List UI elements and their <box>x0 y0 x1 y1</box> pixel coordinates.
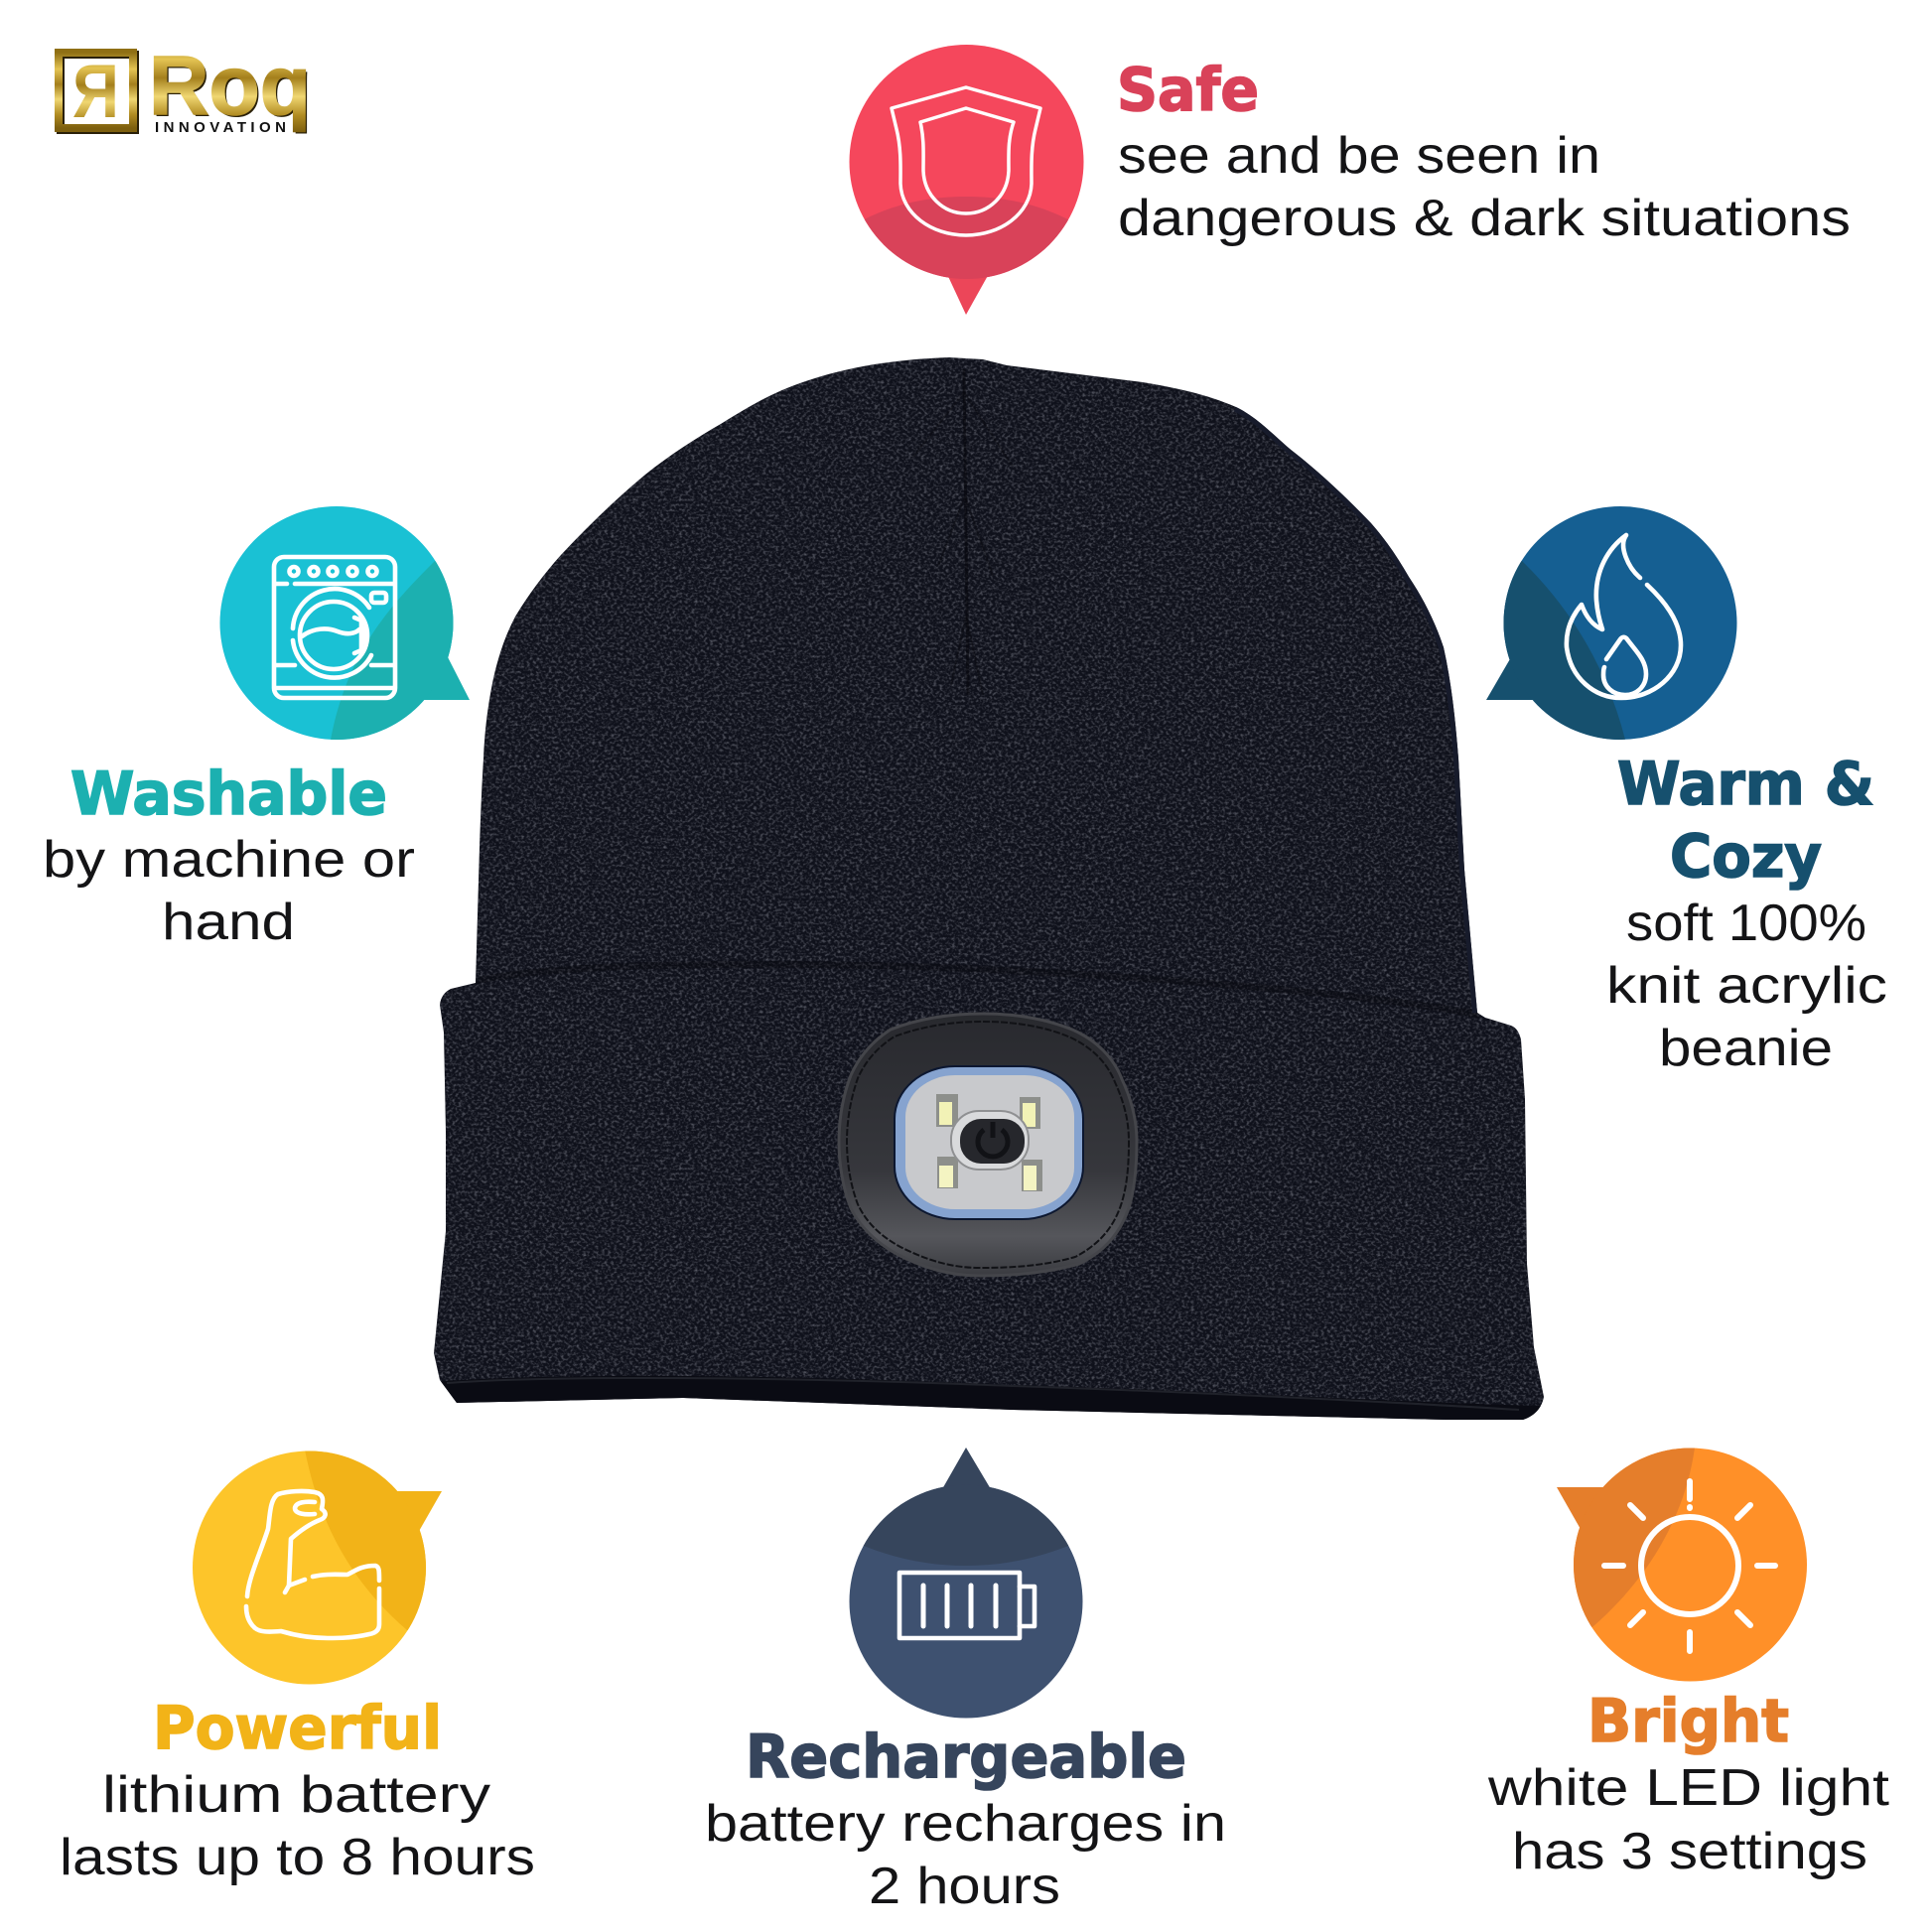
callout: Rechargeable <box>705 1448 1226 1915</box>
beanie body <box>427 347 1549 1430</box>
text: safe description <box>1118 127 1851 247</box>
text: bright description: has 3 settings <box>1512 1823 1867 1880</box>
LED lens <box>894 1065 1084 1220</box>
text: safe description: dangerous & dark situations <box>1118 190 1851 247</box>
logo square mark: Я <box>72 50 119 134</box>
logo wordmark: Roq <box>151 41 313 134</box>
icon: flame in blue bubble <box>1486 506 1737 755</box>
product photo: knit beanie hat <box>427 347 1549 1430</box>
text: warm description: beanie <box>1659 1020 1833 1077</box>
text: powerful description: lasts up to 8 hours <box>60 1829 535 1886</box>
text: safe description: see and be seen in <box>1118 127 1600 185</box>
callout: Washable <box>43 506 470 951</box>
icon: flexed arm in yellow bubble <box>193 1445 442 1684</box>
heading: Safe: Safe <box>1117 56 1259 125</box>
heading: Rechargeable: Rechargeable <box>746 1723 1186 1792</box>
text: rechargeable description: battery recharges in <box>705 1795 1226 1853</box>
leather light patch <box>839 1014 1137 1276</box>
heading: Powerful: Powerful <box>153 1694 442 1763</box>
text: washable description: hand <box>162 894 295 951</box>
power button <box>951 1111 1029 1170</box>
text: rechargeable description <box>705 1795 1226 1915</box>
text: washable description: by machine or <box>43 831 415 889</box>
heading: Warm & Cozy: Cozy <box>1670 822 1822 892</box>
heading: Warm & Cozy: Warm & <box>1617 750 1874 819</box>
icon: washing machine in teal bubble <box>220 506 470 755</box>
callout: Powerful <box>60 1445 535 1886</box>
icon: shield in red pin <box>850 45 1084 315</box>
text: washable description <box>43 831 415 951</box>
icon: battery in navy pin <box>850 1448 1082 1718</box>
text: powerful description <box>60 1766 535 1886</box>
text: warm description <box>1606 895 1887 1077</box>
logo: Roq Innovation <box>59 39 313 136</box>
text: warm description: knit acrylic <box>1606 957 1887 1015</box>
callout: Bright <box>1487 1440 1890 1880</box>
logo wordmark: Roq <box>149 39 311 132</box>
logo wordmark: INNOVATION <box>155 119 286 136</box>
text: rechargeable description: 2 hours <box>869 1858 1060 1915</box>
text: powerful description: lithium battery <box>102 1766 490 1824</box>
heading: Bright: Bright <box>1587 1687 1789 1756</box>
callout: Warm & Cozy <box>1486 506 1887 1077</box>
heading: Washable: Washable <box>70 759 387 829</box>
callout: Safe <box>834 45 1851 315</box>
text: bright description <box>1487 1759 1890 1880</box>
heading: Warm & Cozy <box>1617 750 1874 892</box>
icon: sun in orange bubble <box>1557 1440 1807 1682</box>
text: bright description: white LED light <box>1487 1759 1890 1817</box>
text: warm description: soft 100% <box>1626 895 1866 952</box>
